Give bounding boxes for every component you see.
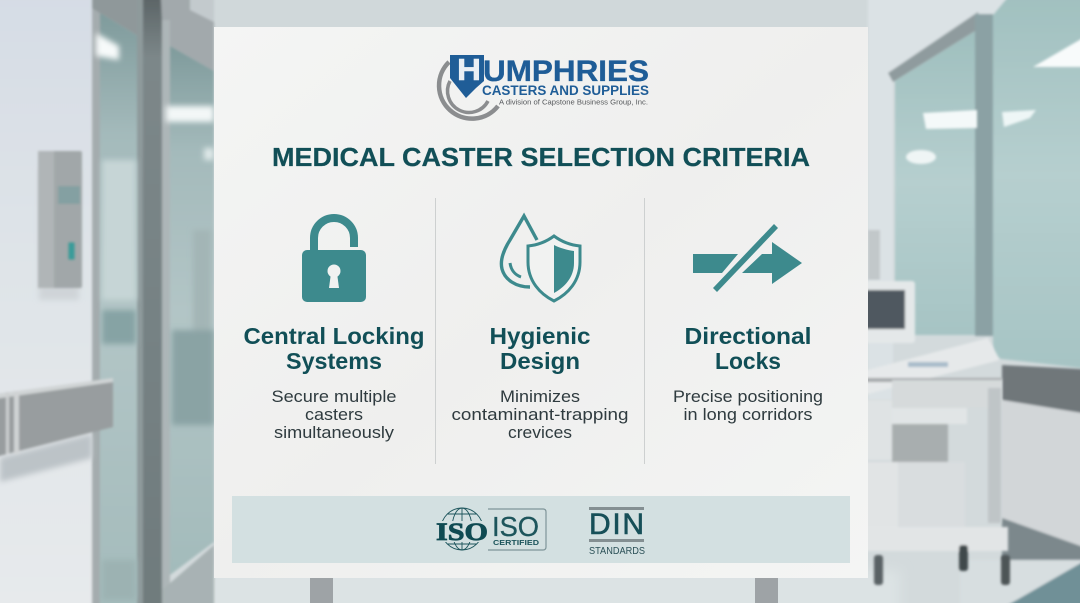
column: hygienic design: contaminant-trapping	[452, 406, 628, 424]
title: MEDICAL CASTER SELECTION CRITERIA	[272, 142, 810, 172]
medical cart and monitor	[860, 281, 1010, 585]
ceiling light reflections right	[906, 28, 1080, 164]
icon: padlock	[302, 218, 366, 302]
ceiling and floor	[200, 0, 900, 603]
sign support legs	[310, 578, 778, 603]
logo wordmark: UMPHRIES	[483, 55, 649, 88]
left door and wall	[0, 0, 214, 603]
column: central locking systems	[244, 218, 424, 442]
badge: DIN standards: DIN	[589, 508, 644, 541]
icon: water drop and shield	[501, 216, 580, 301]
logo blue shield	[450, 52, 484, 98]
description: Precise positioning	[673, 388, 823, 406]
badge: ISO certified	[436, 508, 546, 550]
column: central locking systems: simultaneously	[274, 424, 395, 442]
panel: white sign board	[214, 27, 868, 578]
description: Secure multiple	[272, 388, 396, 406]
logo: Humphries Casters and Supplies	[439, 52, 649, 119]
logo blue shield: H	[457, 52, 481, 87]
globe lines	[441, 508, 483, 550]
logo gray arcs	[439, 62, 498, 119]
column: hygienic design	[452, 216, 628, 442]
badge: ISO certified: ISO	[492, 511, 539, 542]
logo subline: CASTERS AND SUPPLIES	[482, 83, 649, 98]
right corridor glass wall	[868, 0, 1080, 603]
wall keypad	[38, 151, 82, 300]
description: Minimizes	[500, 388, 580, 406]
door handle	[0, 378, 113, 482]
heading: Directional	[684, 323, 812, 349]
column: directional locks: in long corridors	[684, 406, 812, 424]
outlined certified box	[488, 509, 546, 550]
column: hygienic design: crevices	[508, 424, 572, 442]
heading: Hygienic	[490, 323, 591, 349]
logo division line: A division of Capstone Business Group, Inc.	[499, 98, 648, 106]
column: central locking systems: Systems	[286, 348, 382, 374]
icon: crossed-out arrow	[693, 224, 802, 292]
badge: DIN standards	[589, 507, 645, 557]
column dividers	[435, 198, 645, 464]
column: central locking systems: casters	[305, 406, 363, 424]
column: directional locks	[673, 224, 823, 424]
column: hygienic design: Design	[500, 348, 580, 374]
standards band	[232, 496, 850, 563]
blurred reflections left	[96, 33, 214, 600]
badge: ISO certified: CERTIFIED	[493, 538, 540, 547]
column: directional locks: Locks	[715, 348, 781, 374]
ISO serif mark: ISO	[436, 519, 488, 546]
badge: DIN standards: STANDARDS	[589, 546, 645, 557]
heading: Central Locking	[244, 323, 424, 349]
